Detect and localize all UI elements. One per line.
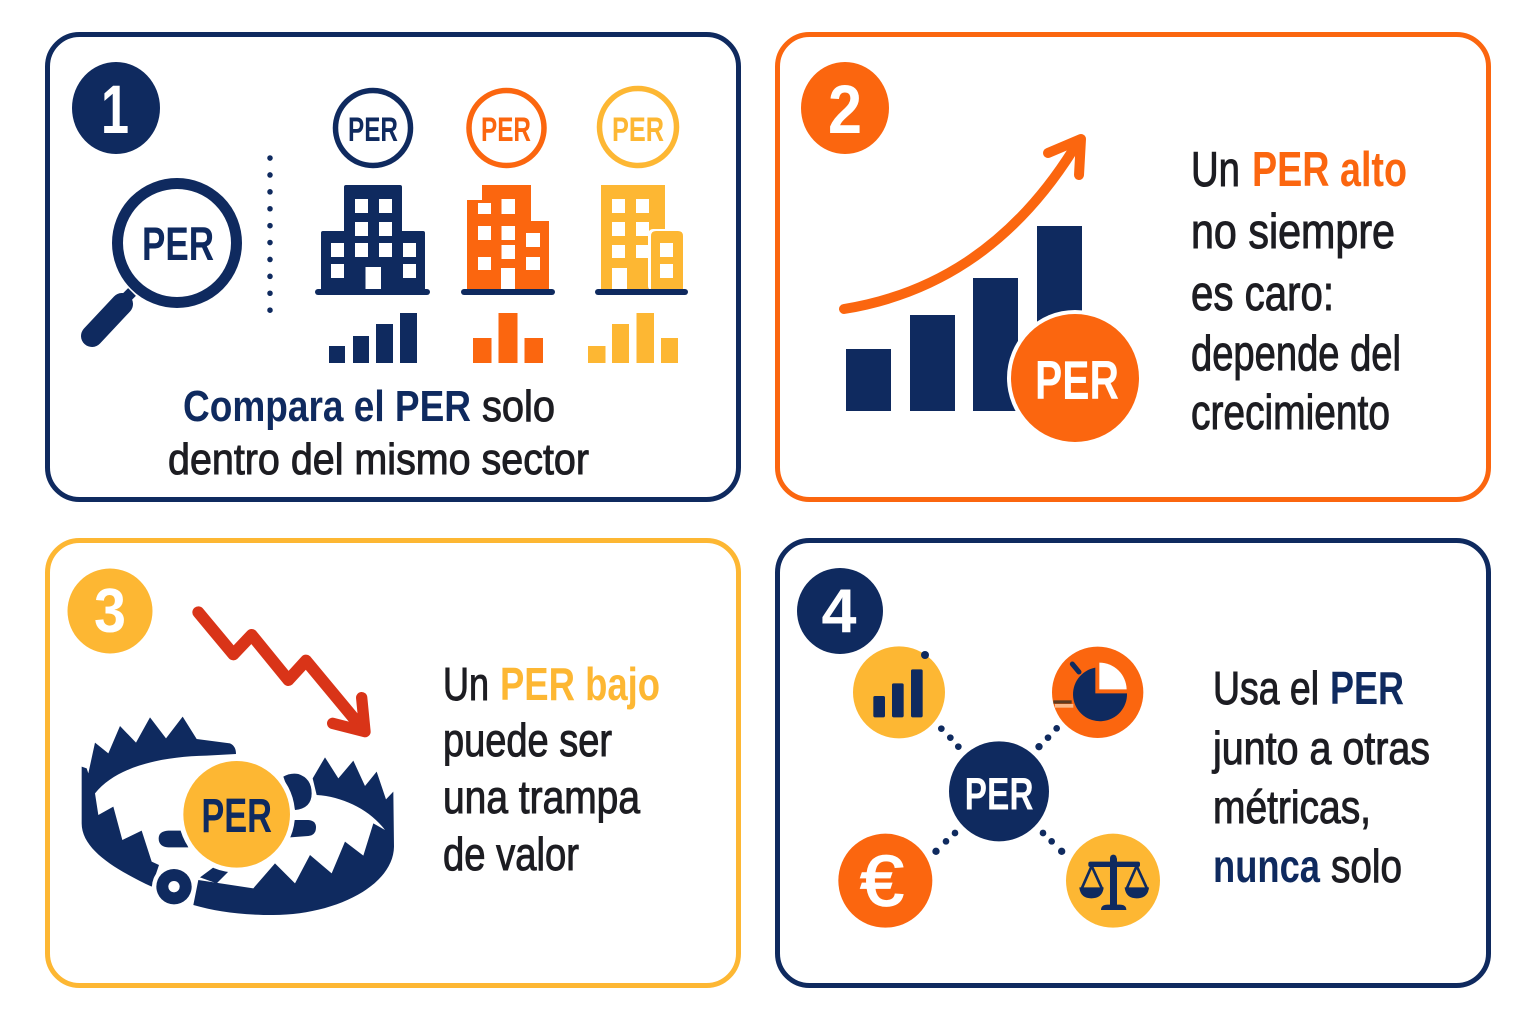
icon: bar chart metric [853, 646, 945, 738]
panel 3 text: una trampa [443, 771, 640, 823]
icon: pie chart metric [1052, 647, 1143, 738]
icon: euro metric: € [860, 842, 904, 922]
chart: rising bars with arrow: PER [1035, 349, 1119, 411]
panel 2 text: es caro: [1191, 267, 1334, 321]
arrow: falling red zigzag [198, 612, 365, 732]
hub: PER: PER [965, 768, 1034, 819]
icon: magnifying glass with PER: PER [142, 217, 214, 270]
panel 4 text: nunca [1213, 840, 1320, 892]
panel 1 frame [48, 34, 738, 500]
panel 4 text: Usa el [1213, 662, 1319, 714]
number badge 2 [801, 62, 889, 154]
number badge 3: 3 [94, 577, 126, 646]
icon: balance scale metric [1066, 834, 1160, 928]
panel 4 text [1211, 662, 1430, 892]
panel 4: use PER with other metrics [778, 540, 1488, 986]
icon: magnifying glass with PER [92, 184, 236, 336]
diagram: PER hub with metrics [838, 646, 1160, 928]
panel 2 frame [778, 34, 1488, 500]
panel 1: compare within sector [48, 34, 738, 500]
panel 4 text: métricas, [1213, 781, 1371, 833]
panel 3 text: de valor [443, 828, 579, 880]
panel 2 text: depende del [1191, 327, 1401, 381]
panel 3: low PER value trap [48, 540, 738, 986]
hub: PER [949, 741, 1049, 841]
panel 4 text: junto a otras [1211, 722, 1430, 774]
panel 1 caption: dentro del mismo sector [168, 435, 589, 484]
panel 4 text: PER [1330, 662, 1404, 714]
panel 3 text: PER bajo [500, 658, 660, 710]
connector dots [932, 725, 1065, 855]
panel 3 text: puede ser [443, 714, 612, 766]
icon: euro metric [838, 834, 932, 928]
orange column: PER badge, building, bars [461, 90, 555, 363]
panel 4 frame [778, 540, 1488, 986]
number badge 1 [72, 62, 160, 154]
icon: bear trap with PER coin [82, 717, 394, 915]
panel 1 caption: Compara el PER [183, 382, 471, 431]
panel 1 caption: solo [482, 382, 555, 431]
yellow column: PER badge, building, bars: PER [612, 111, 664, 149]
number badge 4 [797, 568, 883, 654]
navy column: PER badge, building, bars [315, 90, 430, 363]
panel 2 text: no siempre [1191, 205, 1395, 259]
dotted divider [267, 158, 273, 326]
panel 3 text: Un [443, 658, 489, 710]
number badge 2: 2 [828, 71, 862, 148]
panel 3 text [443, 658, 660, 880]
yellow column: PER badge, building, bars [588, 88, 688, 363]
panel 1 caption [168, 382, 589, 484]
panel 3 frame [48, 540, 738, 986]
panel 2 text: Un [1191, 143, 1240, 197]
navy column: PER badge, building, bars: PER [348, 111, 398, 149]
number badge 1: 1 [101, 71, 129, 148]
chart: rising bars with arrow [844, 139, 1143, 446]
panel 4 text: solo [1331, 840, 1402, 892]
panel 2: high PER and growth [778, 34, 1488, 500]
panel 2 text: PER alto [1252, 143, 1407, 197]
number badge 3 [68, 568, 152, 654]
orange column: PER badge, building, bars: PER [481, 111, 531, 149]
number badge 4: 4 [822, 577, 857, 646]
panel 2 text: crecimiento [1191, 386, 1390, 440]
panel 2 text [1191, 143, 1407, 440]
icon: bear trap with PER coin: PER [201, 789, 272, 843]
